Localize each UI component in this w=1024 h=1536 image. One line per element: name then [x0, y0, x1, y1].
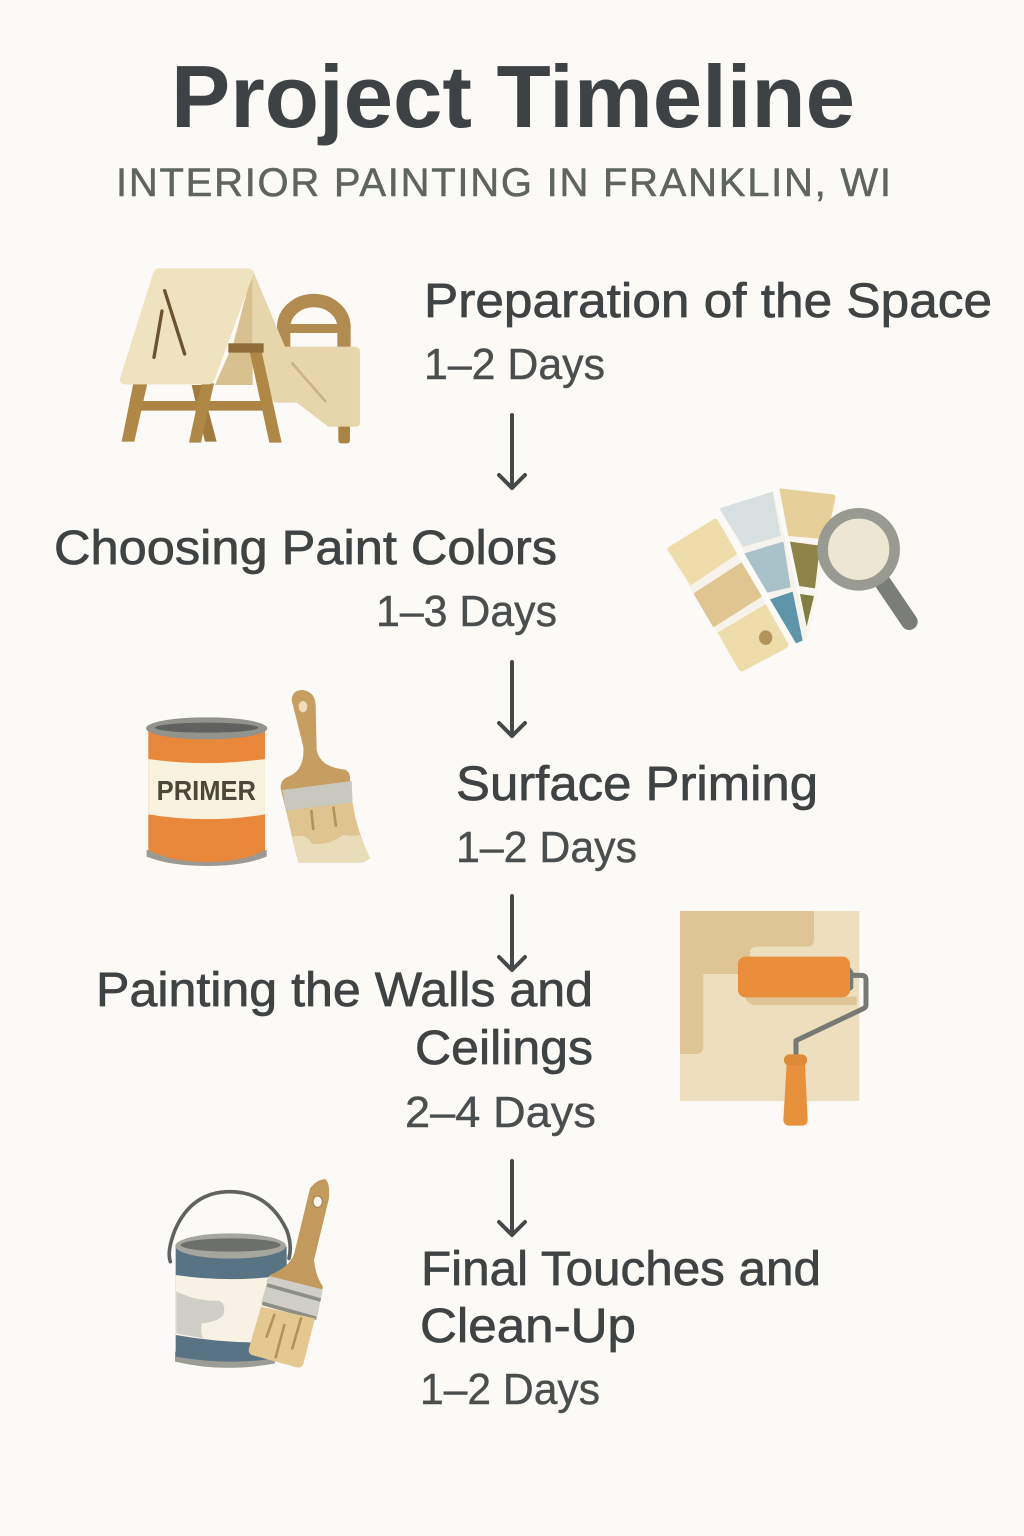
title: Project Timeline — [171, 47, 855, 146]
duration: step 4: 2–4 Days — [405, 1088, 596, 1137]
icon: drop cloth over sawhorse and chair — [120, 268, 360, 443]
step 5: final touches and clean-up — [420, 1243, 821, 1414]
subtitle: INTERIOR PAINTING IN FRANKLIN, WI — [116, 161, 891, 205]
duration: step 2: 1–3 Days — [376, 587, 557, 636]
icon: paint roller on wall — [680, 911, 866, 1126]
arrow 1 — [499, 415, 525, 488]
heading line 2: Ceilings — [415, 1022, 593, 1075]
icon: paint bucket and brush — [169, 1179, 329, 1368]
step 2: choosing paint colors — [54, 522, 557, 636]
duration: step 1: 1–2 Days — [424, 340, 605, 389]
heading: final touches and: Final Touches and — [421, 1243, 821, 1296]
heading: preparation: Preparation of the Space — [424, 275, 992, 328]
step 4: painting the walls and ceilings — [96, 964, 596, 1137]
arrow 3 — [499, 896, 525, 970]
arrow 2 — [499, 662, 525, 736]
icon: primer can and brush: PRIMER — [157, 775, 256, 806]
heading: painting the walls and ceilings: Painting the Walls and — [96, 964, 593, 1017]
heading: choosing paint colors: Choosing Paint Colors — [54, 522, 557, 575]
heading line 2: Clean-Up — [420, 1300, 636, 1353]
duration: step 5: 1–2 Days — [420, 1365, 600, 1414]
arrow 4 — [499, 1161, 525, 1235]
step 1: preparation of the space — [424, 275, 992, 389]
step 3: surface priming — [456, 758, 818, 872]
icon: primer can and brush — [146, 690, 370, 866]
heading: surface priming: Surface Priming — [456, 758, 818, 811]
duration: step 3: 1–2 Days — [456, 823, 637, 872]
icon: color swatches and magnifying glass — [668, 488, 909, 671]
